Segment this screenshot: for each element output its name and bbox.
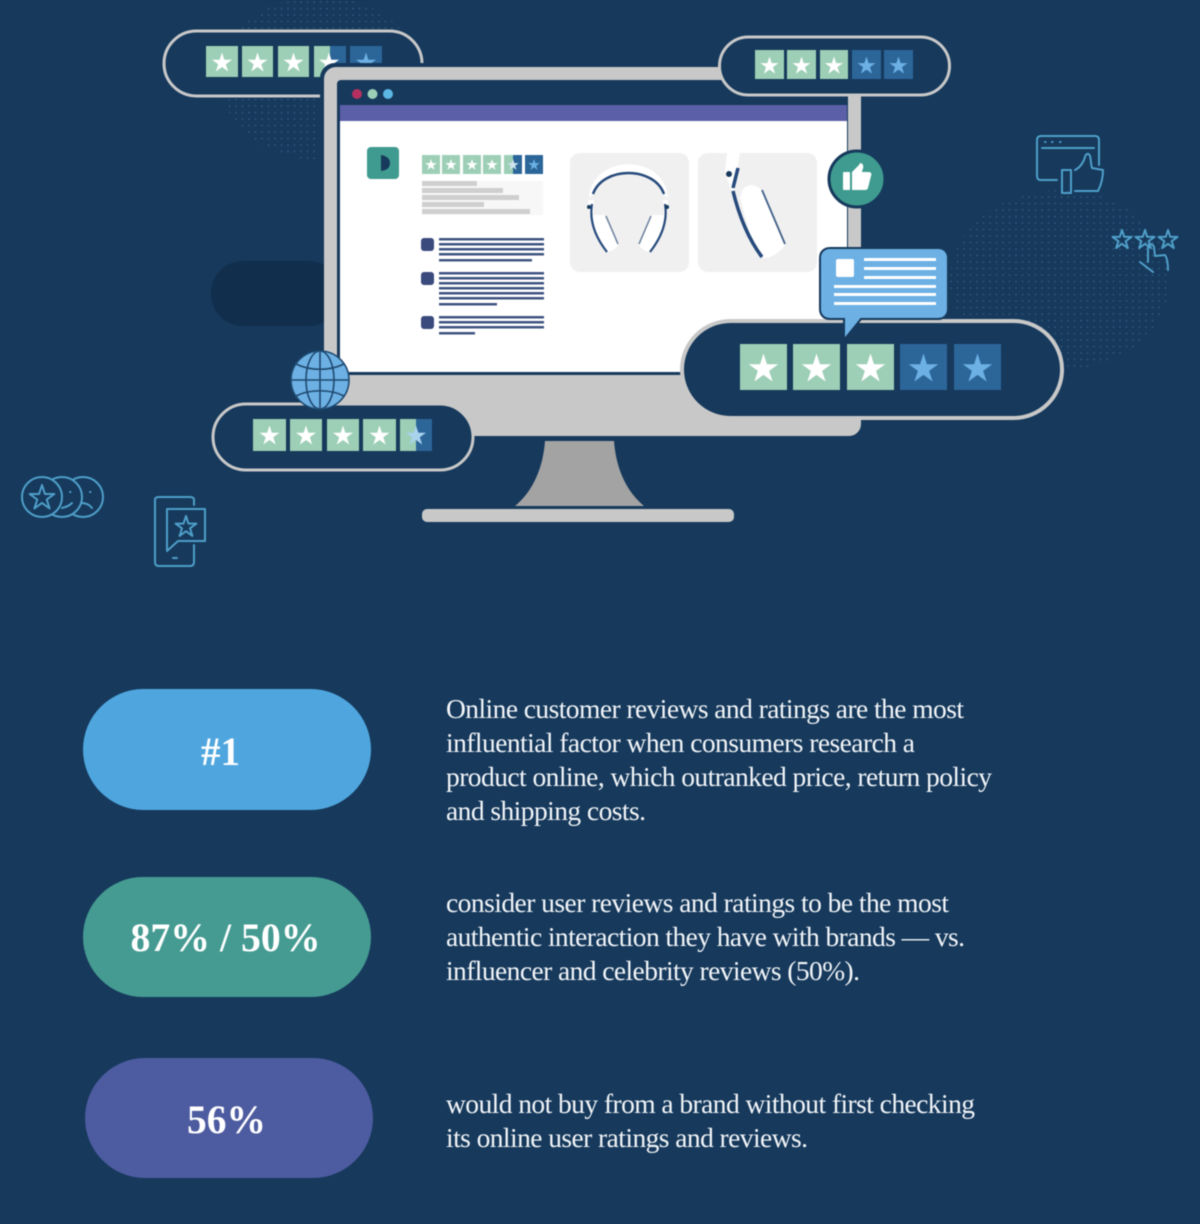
rating pill: bottom left bbox=[213, 404, 473, 470]
icon: stars and pointing hand bbox=[1112, 230, 1178, 272]
rating pill: large bbox=[682, 321, 1062, 418]
description 2: consider user reviews and ratings to be the most bbox=[446, 887, 949, 918]
description 2: authentic interaction they have with brands — vs. bbox=[446, 921, 965, 952]
grey summary lines bbox=[422, 181, 543, 215]
product card: headphones front bbox=[570, 153, 689, 272]
description 2: influencer and celebrity reviews (50%). bbox=[446, 955, 860, 986]
description 3 bbox=[446, 1088, 975, 1153]
stat row 3 bbox=[85, 1058, 975, 1178]
dark pill behind monitor bbox=[211, 261, 341, 326]
description 3: would not buy from a brand without first checking bbox=[446, 1088, 975, 1119]
stat row 1 bbox=[83, 689, 992, 826]
monitor frame bbox=[324, 67, 861, 436]
speech bubble bbox=[820, 248, 948, 340]
rating pill: top right bbox=[720, 37, 950, 95]
small star rating bbox=[422, 155, 543, 174]
icon: browser thumbs up bbox=[1037, 136, 1103, 193]
monitor base bbox=[422, 509, 734, 522]
screen bbox=[337, 80, 848, 375]
description 1 bbox=[446, 693, 992, 826]
pill: #1 bbox=[83, 689, 371, 810]
pill: 56%: 56% bbox=[187, 1097, 266, 1142]
window dots bbox=[352, 89, 393, 99]
description 1: influential factor when consumers research a bbox=[446, 727, 915, 758]
description 3: its online user ratings and reviews. bbox=[446, 1122, 808, 1153]
description 1: and shipping costs. bbox=[446, 795, 646, 826]
monitor outline gap bbox=[320, 63, 866, 441]
browser bar bbox=[340, 105, 847, 121]
stat row 2 bbox=[83, 877, 965, 997]
review list bbox=[421, 238, 544, 334]
monitor stand bbox=[515, 441, 644, 506]
icon: globe bbox=[291, 351, 349, 409]
pill: 87% / 50% bbox=[83, 877, 371, 997]
rating pill: top left bbox=[164, 31, 422, 96]
brand logo bbox=[367, 147, 399, 179]
product card: headphones side bbox=[698, 153, 817, 272]
halftone dots: top bbox=[220, 0, 420, 160]
icon: phone with star review bbox=[155, 497, 205, 566]
description 1: product online, which outranked price, return policy bbox=[446, 761, 992, 792]
monitor bbox=[324, 67, 861, 522]
pill: 56% bbox=[85, 1058, 373, 1178]
icon: face ratings bbox=[22, 477, 103, 517]
pill: #1: #1 bbox=[201, 729, 240, 774]
description 1: Online customer reviews and ratings are the most bbox=[446, 693, 964, 724]
pill: 87% / 50%: 87% / 50% bbox=[130, 915, 320, 960]
icon: thumbs up badge bbox=[829, 151, 885, 207]
description 2 bbox=[446, 887, 965, 986]
halftone dots: right bbox=[950, 190, 1170, 370]
